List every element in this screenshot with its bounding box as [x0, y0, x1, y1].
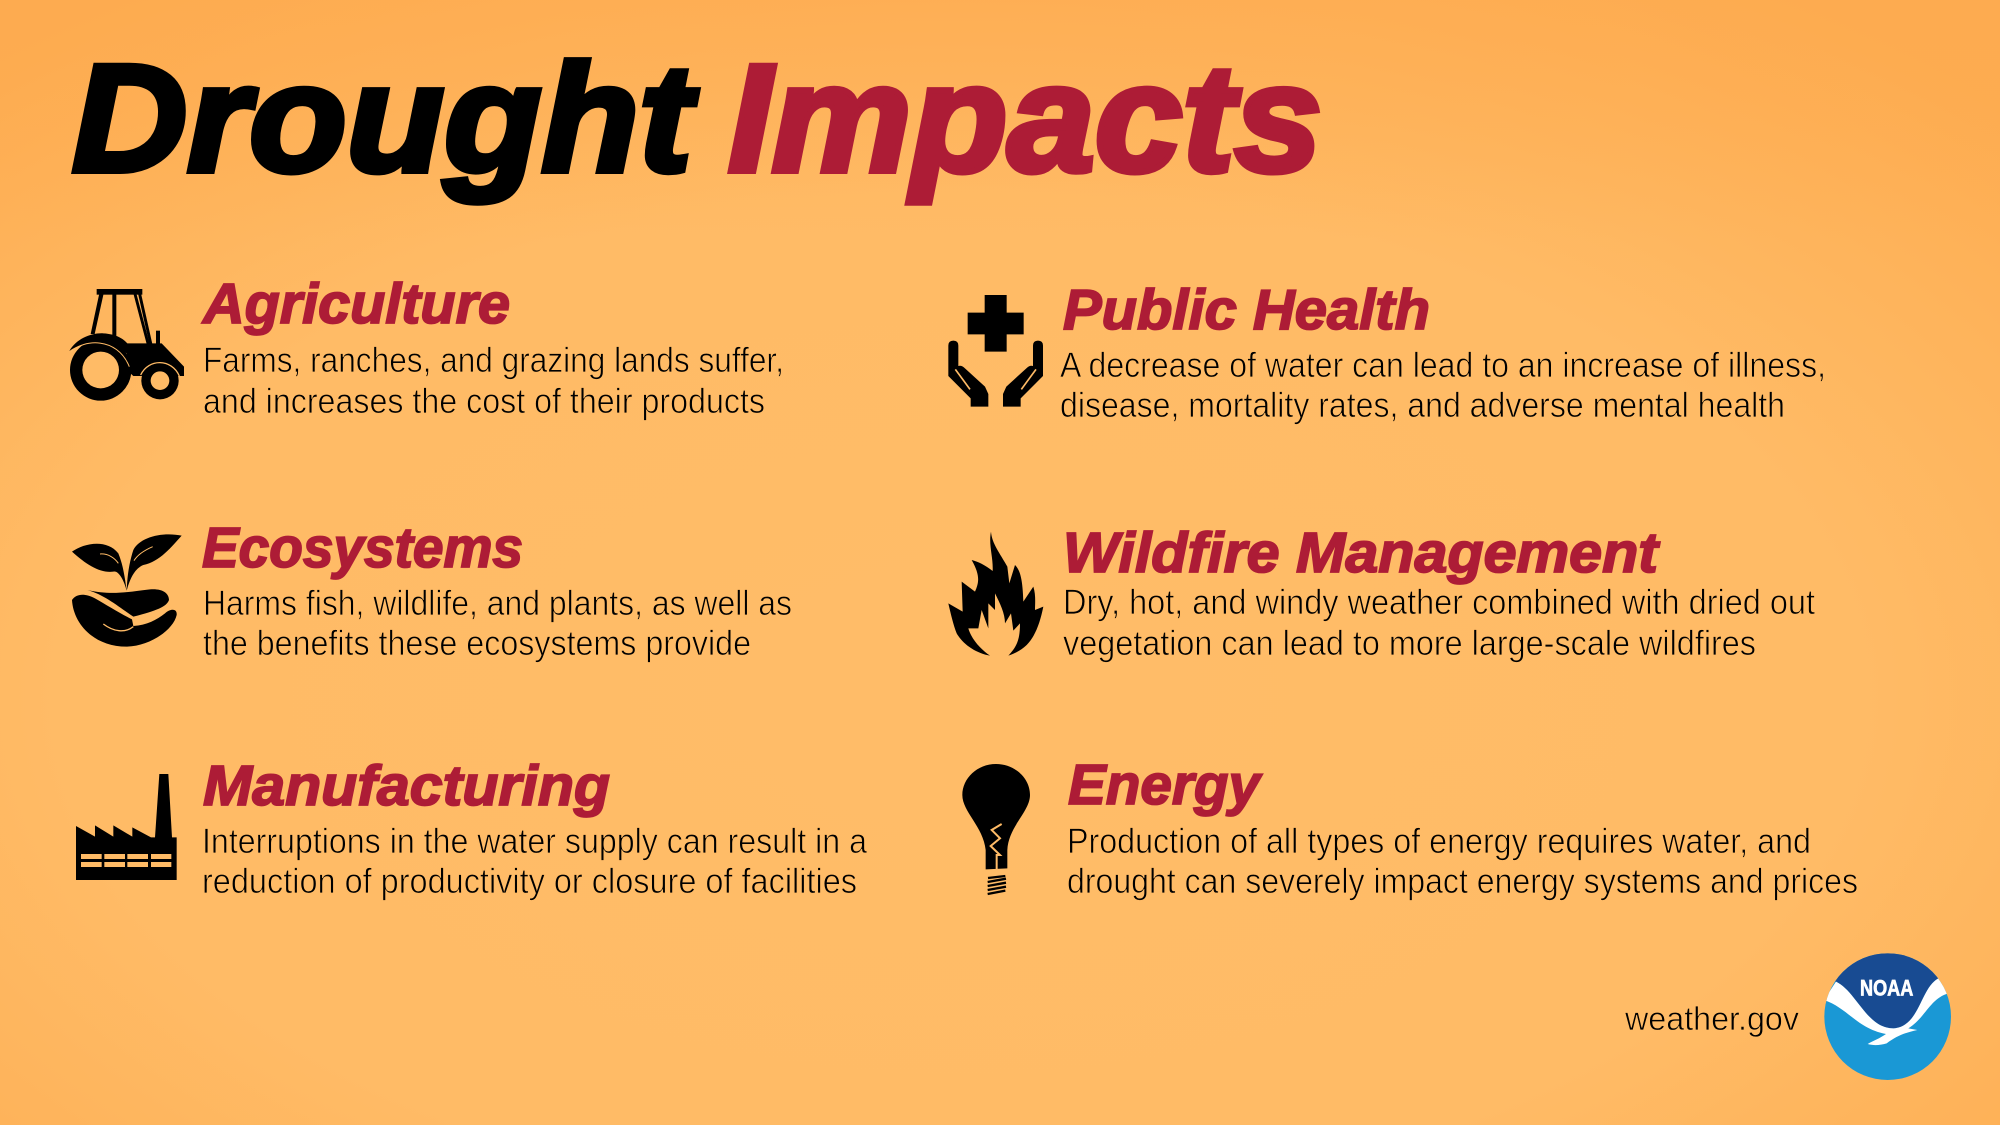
text block: [202, 822, 867, 901]
title: Impacts: [728, 33, 1322, 204]
text block: [1067, 822, 1858, 901]
text block: Interruptions in the water supply can result in a: [202, 822, 867, 861]
heading: Energy: [1068, 753, 1263, 817]
title: Drought: [72, 33, 698, 204]
text block: drought can severely impact energy systems and prices: [1067, 862, 1858, 901]
text block: A decrease of water can lead to an increase of illness,: [1060, 346, 1826, 385]
icon: factory: [76, 774, 177, 880]
panel: wildfire management: [948, 521, 1815, 663]
icon: hands with cross: [948, 295, 1043, 407]
panel: ecosystems: [72, 516, 792, 663]
text block: [1060, 346, 1826, 425]
panel: energy: [962, 753, 1858, 901]
heading: Agriculture: [201, 272, 510, 336]
text block: reduction of productivity or closure of facilities: [202, 862, 857, 901]
icon: plant in hands: [72, 534, 182, 647]
text block: [203, 584, 792, 663]
text block: [203, 341, 784, 421]
panel: manufacturing: [76, 754, 867, 901]
title: [72, 33, 1322, 204]
icon: NOAA logo: [1824, 953, 1951, 1080]
text block: the benefits these ecosystems provide: [203, 624, 751, 663]
panel: agriculture: [69, 272, 784, 421]
text block: and increases the cost of their products: [203, 382, 765, 421]
text block: Dry, hot, and windy weather combined with dried out: [1063, 583, 1815, 622]
text block: [1063, 583, 1815, 663]
text block: vegetation can lead to more large-scale wildfires: [1063, 624, 1756, 663]
heading: Manufacturing: [203, 754, 610, 818]
icon: light bulb: [962, 764, 1030, 894]
heading: Public Health: [1063, 278, 1430, 342]
text block: Production of all types of energy requires water, and: [1067, 822, 1811, 861]
website label: weather.gov: [1624, 1000, 1799, 1037]
text block: disease, mortality rates, and adverse mental health: [1060, 386, 1785, 425]
heading: Ecosystems: [202, 516, 523, 580]
icon: tractor: [69, 289, 184, 401]
panel: public health: [948, 278, 1826, 425]
icon: flame: [948, 532, 1043, 656]
text block: Farms, ranches, and grazing lands suffer,: [203, 341, 784, 380]
icon: NOAA logo: NOAA: [1860, 976, 1913, 1001]
heading: Wildfire Management: [1063, 521, 1660, 585]
text block: Harms fish, wildlife, and plants, as well as: [203, 584, 792, 623]
